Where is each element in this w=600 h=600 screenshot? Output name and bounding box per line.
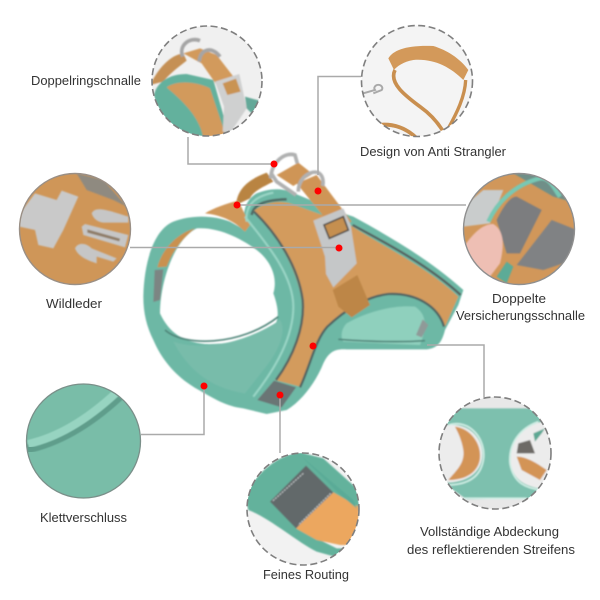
- connector lines: [130, 76, 484, 453]
- detail circle: full reflective coverage: [436, 395, 554, 513]
- grey strip left: [153, 269, 163, 302]
- buckle: [313, 208, 357, 287]
- label: Vollständige Abdeckung des reflektierenden Streifens: Vollständige Abdeckung: [420, 525, 559, 539]
- right teal edge with dark piping: [353, 225, 461, 295]
- label: Vollständige Abdeckung des reflektierenden Streifens: des reflektierenden Streifens: [407, 543, 575, 557]
- harness teal silhouette: [143, 189, 463, 414]
- harness product illustration: [143, 154, 463, 414]
- inner lining of rear loop: [342, 306, 425, 345]
- detail circle: double safety buckle: [462, 172, 576, 286]
- label: Doppelte Versicherungsschnalle: Doppelte: [492, 292, 546, 306]
- label: Feines Routing: Feines Routing: [263, 568, 349, 582]
- detail circle: anti strangler: [358, 22, 476, 140]
- tan inner strap in loop: [157, 228, 195, 267]
- fabric ridge: [28, 393, 116, 444]
- tan back loop strap: [236, 173, 273, 205]
- label: Wildleder: Wildleder: [46, 297, 102, 311]
- label: Doppelte Versicherungsschnalle: Versicherungsschnalle: [456, 309, 585, 323]
- detail circle: hook and loop fabric: [24, 380, 144, 500]
- strap end with stitching: [333, 275, 370, 317]
- D rings: [271, 154, 323, 195]
- dark piping under body: [254, 212, 303, 380]
- label: Vollständige Abdeckung des reflektierenden Streifens: [407, 525, 575, 557]
- callout markers: [200, 160, 342, 398]
- rear loop stitching: [338, 339, 425, 342]
- neck strap: [297, 175, 352, 228]
- teal collar light rim: [245, 193, 293, 397]
- detail circle: double ring buckle: [150, 24, 265, 139]
- label: Klettverschluss: Klettverschluss: [40, 511, 127, 525]
- strap between rings: [277, 163, 313, 186]
- lining of chest loop: [173, 320, 283, 393]
- label: Doppelringschnalle: Doppelringschnalle: [31, 74, 141, 88]
- buckle window: [324, 217, 348, 238]
- dark stitch around chest opening: [165, 317, 278, 341]
- reflective grey patch: [257, 381, 296, 407]
- fabric ridge shadow: [27, 396, 120, 449]
- grey strip right: [416, 319, 428, 337]
- collar dark piping: [252, 199, 287, 215]
- tan shoulder piece: [205, 201, 250, 232]
- label: Doppelte Versicherungsschnalle: [456, 292, 585, 323]
- label: Design von Anti Strangler: Design von Anti Strangler: [360, 145, 506, 159]
- tan main body panel: [254, 202, 458, 387]
- detail circle: fine routing: [245, 450, 363, 568]
- detail circle: suede buckle: [18, 172, 132, 286]
